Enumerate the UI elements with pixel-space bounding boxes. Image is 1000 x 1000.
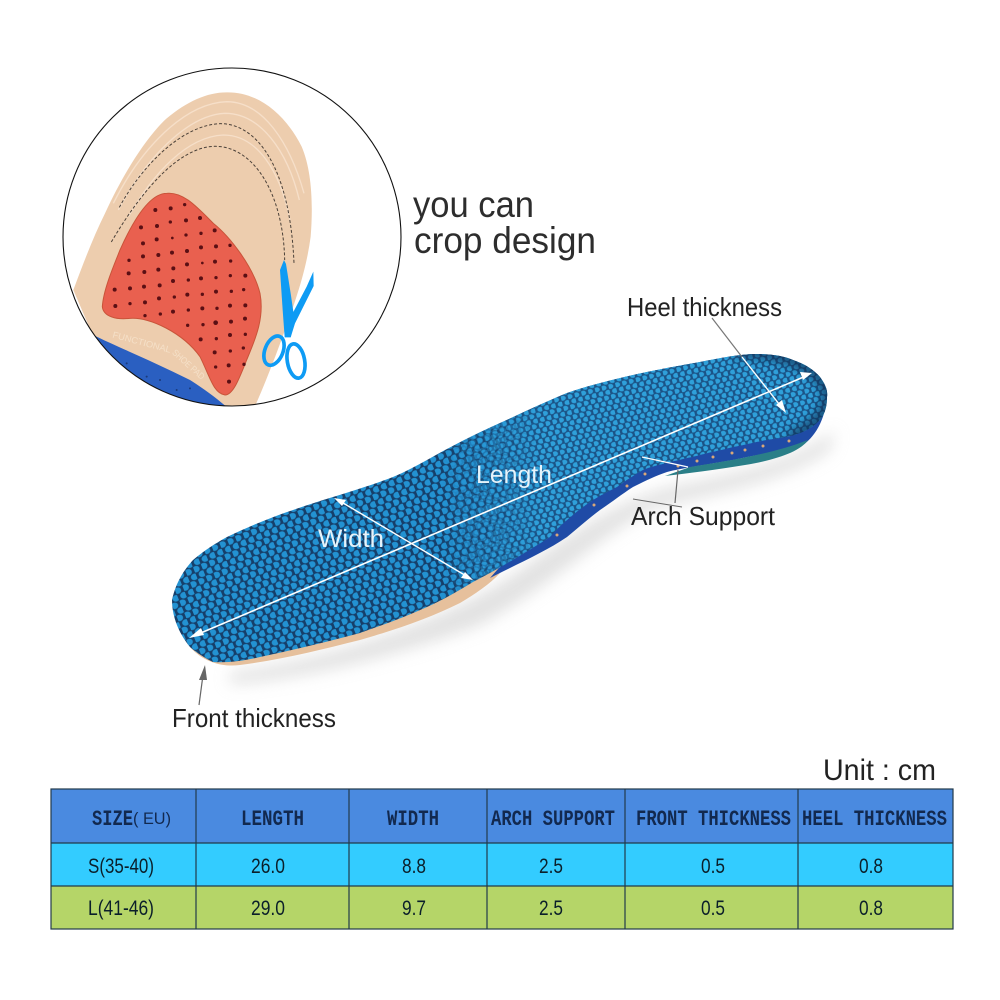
header row: LENGTH: [241, 807, 304, 832]
row: S(35-40): 0.5: [701, 855, 725, 878]
insole shadow: [230, 430, 835, 684]
row: S(35-40): S(35-40): [88, 855, 154, 878]
arch support pointer: [633, 457, 688, 507]
beige foam base at toe: [190, 537, 550, 666]
insole photo with measurements: [160, 318, 840, 705]
header row: FRONT THICKNESS: [636, 807, 791, 832]
width arrow: [334, 498, 473, 580]
blue underside: [96, 336, 225, 406]
row: L(41-46): 0.8: [859, 897, 883, 920]
heading: you can crop design: [413, 184, 596, 261]
row: L(41-46): 9.7: [402, 897, 426, 920]
length arrow: [189, 372, 812, 638]
circular inset: crop design detail: [63, 68, 401, 413]
label: heel thickness: Heel thickness: [627, 292, 782, 322]
unit label: Unit : cm: [823, 754, 936, 787]
label: width: Width: [318, 525, 384, 553]
row: S(35-40): [51, 843, 953, 886]
header row: SIZE: [92, 807, 133, 832]
row: L(41-46): 0.5: [701, 897, 725, 920]
heel and arch side layers: [490, 397, 827, 578]
header row: HEEL THICKNESS: [802, 807, 947, 832]
row: L(41-46): 29.0: [251, 897, 285, 920]
front thickness arrow: [199, 665, 207, 705]
row: L(41-46): L(41-46): [88, 897, 154, 920]
row: L(41-46): 2.5: [539, 897, 563, 920]
circular inset: crop design detail: SHOE PAD: [170, 347, 207, 382]
row: S(35-40): 2.5: [539, 855, 563, 878]
header row: ARCH SUPPORT: [491, 807, 615, 832]
heading: you can crop design: crop design: [414, 220, 596, 261]
row: S(35-40): 26.0: [251, 855, 285, 878]
red arch pad with perforations: [102, 193, 261, 395]
label: front thickness: Front thickness: [172, 703, 336, 733]
beige insole forefoot: [73, 92, 312, 410]
size table: [51, 789, 953, 929]
side perforation dots: [556, 440, 790, 536]
label: length: Length: [476, 461, 552, 489]
row: L(41-46): [51, 886, 953, 929]
heel thickness arrow: [712, 318, 786, 413]
dashed trim lines: [111, 124, 294, 263]
header row: ( EU): [133, 809, 171, 828]
label: arch support: Arch Support: [631, 501, 776, 531]
heading: you can crop design: you can: [413, 184, 534, 225]
row: S(35-40): 0.8: [859, 855, 883, 878]
textured top surface: [172, 354, 828, 662]
row: S(35-40): 8.8: [402, 855, 426, 878]
icon: scissors: [260, 260, 314, 380]
trim contour lines: [113, 102, 304, 220]
imprint text: FUNCTIONAL: [111, 330, 172, 355]
header row: WIDTH: [387, 807, 439, 832]
header row: [51, 789, 953, 843]
